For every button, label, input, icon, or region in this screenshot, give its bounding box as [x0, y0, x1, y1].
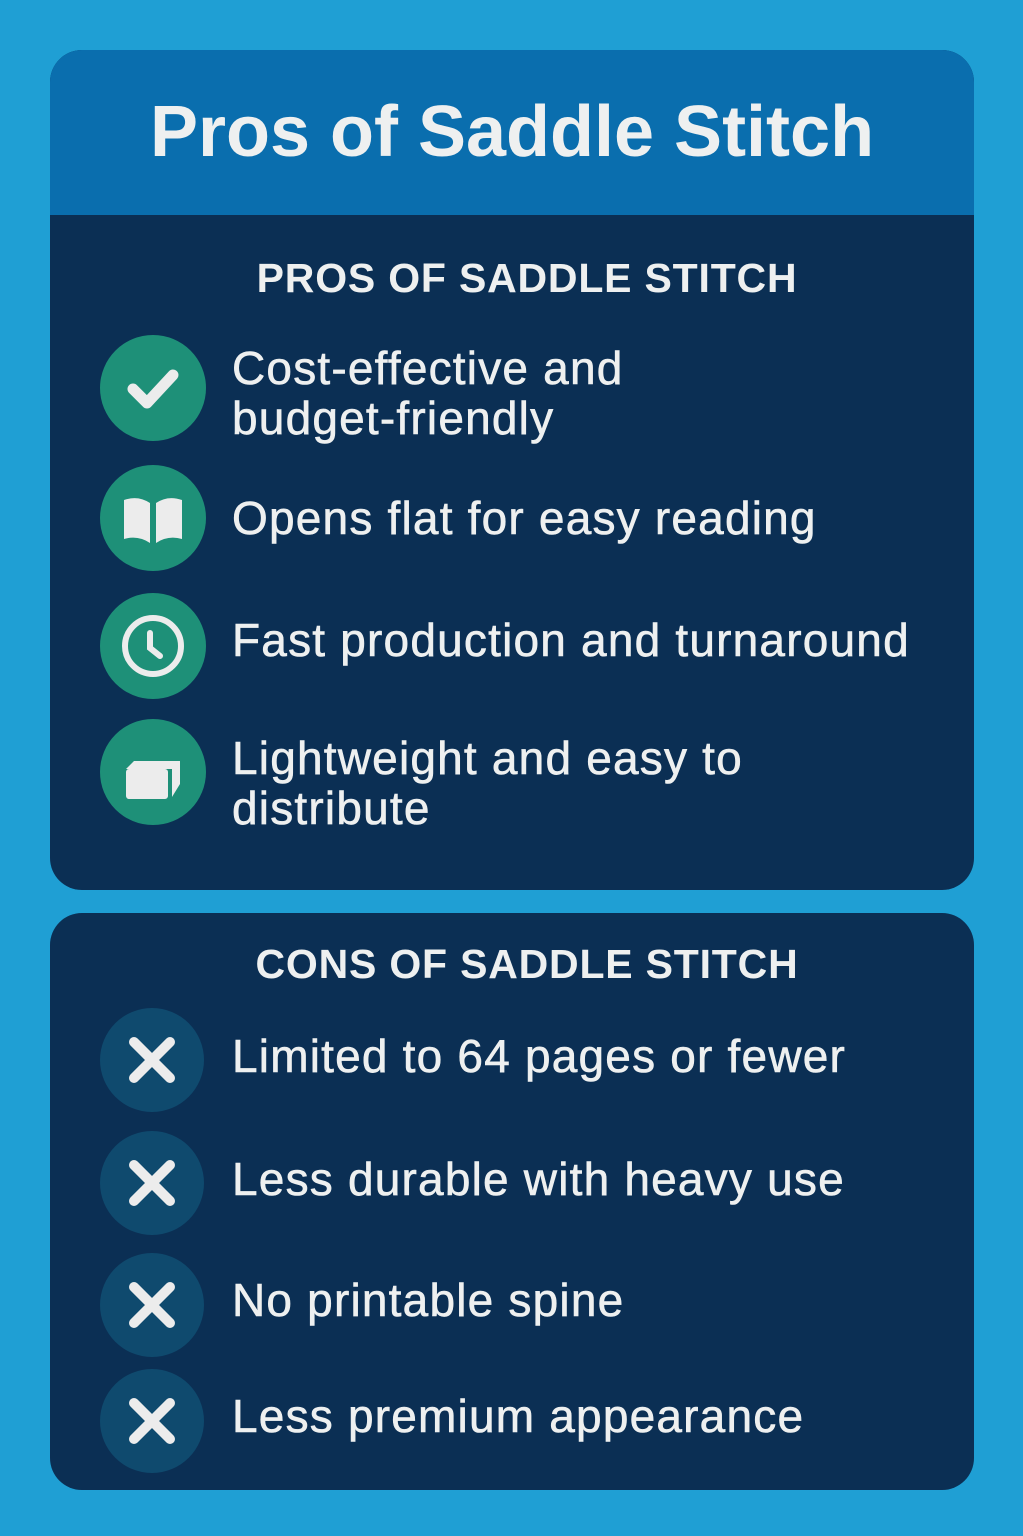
pro item 3	[100, 593, 910, 699]
title: Pros of Saddle Stitch	[150, 92, 874, 172]
pro item 1: budget-friendly	[232, 392, 554, 444]
con item 2: Less durable with heavy use	[232, 1153, 845, 1205]
con item 3: No printable spine	[232, 1274, 624, 1326]
pro item 4: distribute	[232, 782, 431, 834]
title	[50, 50, 974, 215]
icon: check	[100, 335, 206, 441]
con item 1: Limited to 64 pages or fewer	[232, 1030, 846, 1082]
icon: box	[100, 719, 206, 825]
heading: pros: PROS OF SADDLE STITCH	[257, 255, 797, 301]
heading: cons: CONS OF SADDLE STITCH	[256, 941, 798, 987]
con item 2	[100, 1131, 845, 1235]
pro item 2: Opens flat for easy reading	[232, 492, 817, 544]
pro item 1: Cost-effective and	[232, 342, 624, 394]
icon: x	[100, 1369, 204, 1473]
con item 1	[100, 1008, 846, 1112]
icon: x	[100, 1008, 204, 1112]
icon: x	[100, 1131, 204, 1235]
pro item 2	[100, 465, 817, 571]
con item 4	[100, 1369, 804, 1473]
pro item 3: Fast production and turnaround	[232, 614, 910, 666]
pro item 4: Lightweight and easy to	[232, 732, 743, 784]
icon: clock	[100, 593, 206, 699]
con item 3	[100, 1253, 624, 1357]
pro item 1	[100, 335, 624, 444]
con item 4: Less premium appearance	[232, 1390, 804, 1442]
icon: book	[100, 465, 206, 571]
icon: x	[100, 1253, 204, 1357]
pro item 4	[100, 719, 743, 834]
panel: pros	[50, 50, 974, 890]
panel: cons	[50, 913, 974, 1490]
